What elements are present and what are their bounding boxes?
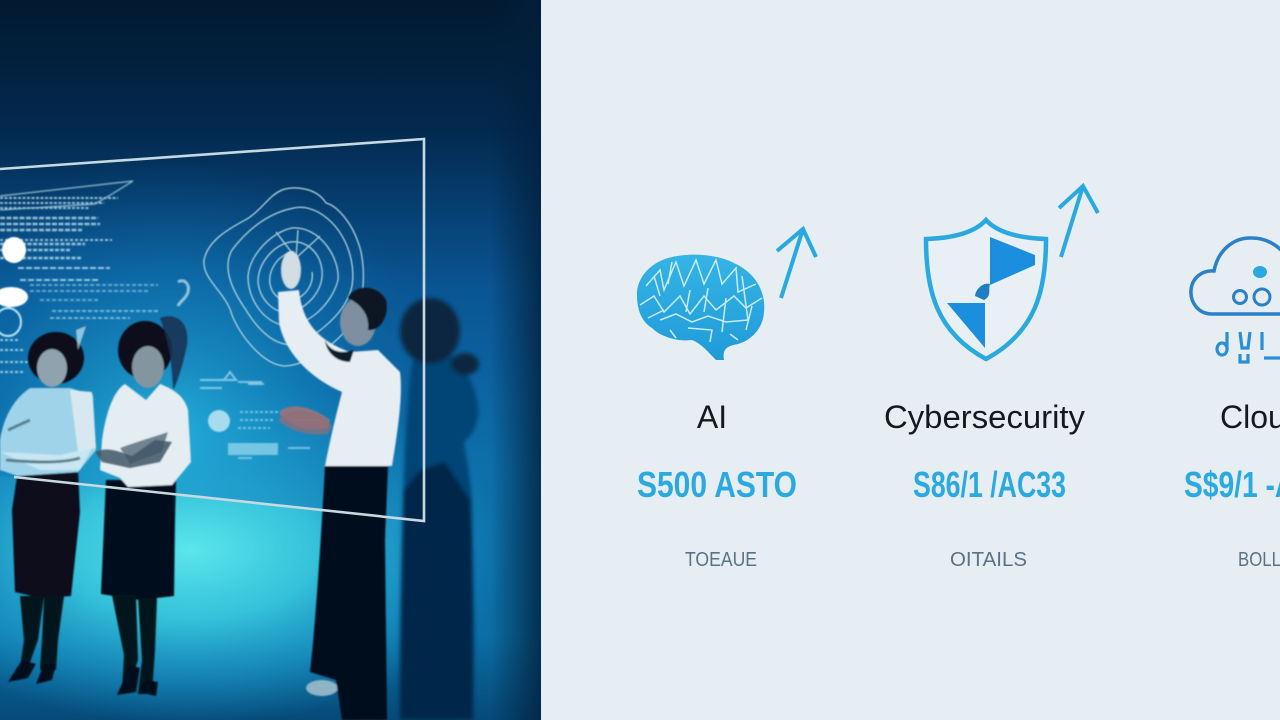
- person 1: woman with translucent blouse: [0, 326, 172, 684]
- hand: [281, 251, 301, 289]
- icon: cloud: [1191, 238, 1280, 362]
- value: Cybersecurity: S86/1 /AC33: [913, 464, 1066, 505]
- foot: [306, 680, 338, 696]
- person 2: woman in white blouse: [100, 316, 191, 696]
- hair: [118, 321, 172, 379]
- head: [37, 349, 67, 387]
- screen lower widgets: [178, 281, 330, 458]
- person 4: shadow figure: [400, 298, 479, 720]
- icon: shield: [926, 220, 1046, 359]
- screen contour diagram: [204, 188, 363, 366]
- label: Cybersecurity: Cybersecurity: [884, 399, 1085, 435]
- caption: AI: TOEAUE: [685, 549, 757, 571]
- blouse: [100, 384, 191, 487]
- tablet: [95, 440, 172, 468]
- column: Cybersecurity: [884, 186, 1098, 571]
- arrow: AI growth: [777, 229, 816, 298]
- shoes: [8, 660, 56, 684]
- legs: [112, 595, 157, 694]
- skirt: [12, 470, 80, 598]
- hair: [28, 332, 84, 384]
- label: AI: AI: [697, 399, 727, 435]
- legs: [20, 596, 64, 670]
- value: AI: S500 ASTO: [637, 464, 797, 505]
- screen data text lines: [0, 181, 158, 372]
- head: [132, 346, 164, 388]
- caption: Cybersecurity: OITAILS: [950, 549, 1027, 571]
- panel: photo of team at a holographic screen: [0, 0, 541, 720]
- head and hair: [340, 298, 376, 346]
- blouse: [0, 388, 96, 476]
- shoes: [117, 665, 158, 696]
- trousers: [310, 466, 388, 720]
- column: AI: [637, 229, 816, 571]
- skirt: [101, 480, 176, 600]
- person 3: man drawing on screen: [278, 251, 401, 720]
- panel: right background: [541, 0, 1280, 720]
- shirt and raised arm: [278, 290, 401, 466]
- screen frame: [0, 139, 424, 521]
- screen white blobs: [0, 237, 28, 336]
- icon: brain: [637, 255, 764, 360]
- column: Cloud: [1184, 238, 1280, 571]
- arrow: cybersecurity growth: [1059, 186, 1098, 257]
